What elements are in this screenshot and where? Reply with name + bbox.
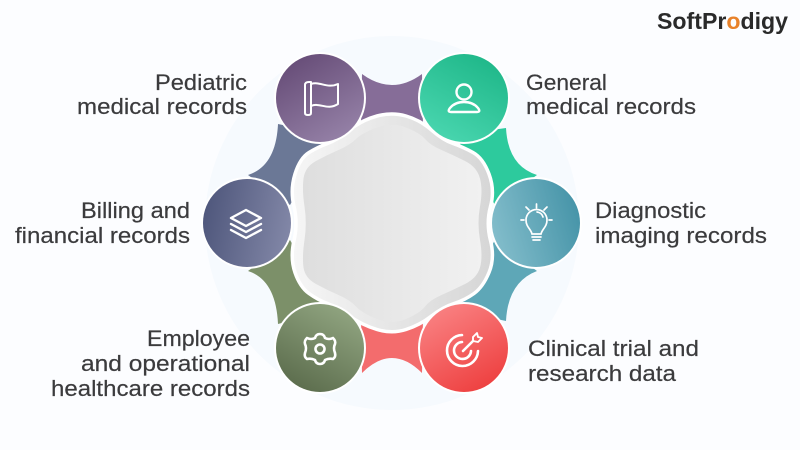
icon: person (449, 84, 479, 112)
label: pediatric (77, 70, 247, 119)
center outer ring (292, 114, 492, 332)
connector: purple (361, 74, 423, 125)
label: general: General (526, 70, 607, 95)
label: diagnostic: Diagnostic (595, 198, 706, 223)
connector: teal (455, 240, 537, 321)
label: pediatric: Pediatric (155, 70, 247, 95)
label: employee: Employee (147, 326, 250, 351)
label: billing (15, 198, 190, 248)
center wavy panel (292, 114, 492, 332)
icon: gear (305, 334, 335, 364)
label: employee: healthcare records (51, 376, 250, 401)
label: employee (51, 326, 250, 401)
icon: flag (305, 82, 338, 115)
label: clinical (528, 336, 699, 386)
label: pediatric: medical records (77, 94, 247, 119)
node: teal bulb (490, 177, 582, 269)
background halo circle (205, 36, 579, 410)
center inner core (303, 125, 482, 322)
node: green person (418, 52, 510, 144)
logo: SoftProdigy (657, 8, 788, 34)
label: billing: Billing and (81, 198, 190, 223)
node: red target (418, 302, 510, 394)
connector: red (361, 320, 423, 373)
icon: lightbulb (521, 204, 552, 240)
node: navy layers (201, 177, 293, 269)
icon: target (447, 333, 482, 366)
connector: green (455, 128, 537, 205)
label: employee: and operational (81, 351, 250, 376)
label: billing: financial records (15, 223, 190, 248)
label: diagnostic (595, 198, 767, 248)
node: purple flag (274, 52, 366, 144)
label: general: medical records (526, 94, 696, 119)
label: clinical: Clinical trial and (528, 336, 699, 361)
label: clinical: research data (528, 361, 677, 386)
label: diagnostic: imaging records (595, 223, 767, 248)
label: general (526, 70, 696, 119)
icon: layers (231, 210, 261, 238)
connector: olive (248, 240, 330, 324)
connector: navy (248, 124, 330, 205)
node: olive gear (274, 302, 366, 394)
